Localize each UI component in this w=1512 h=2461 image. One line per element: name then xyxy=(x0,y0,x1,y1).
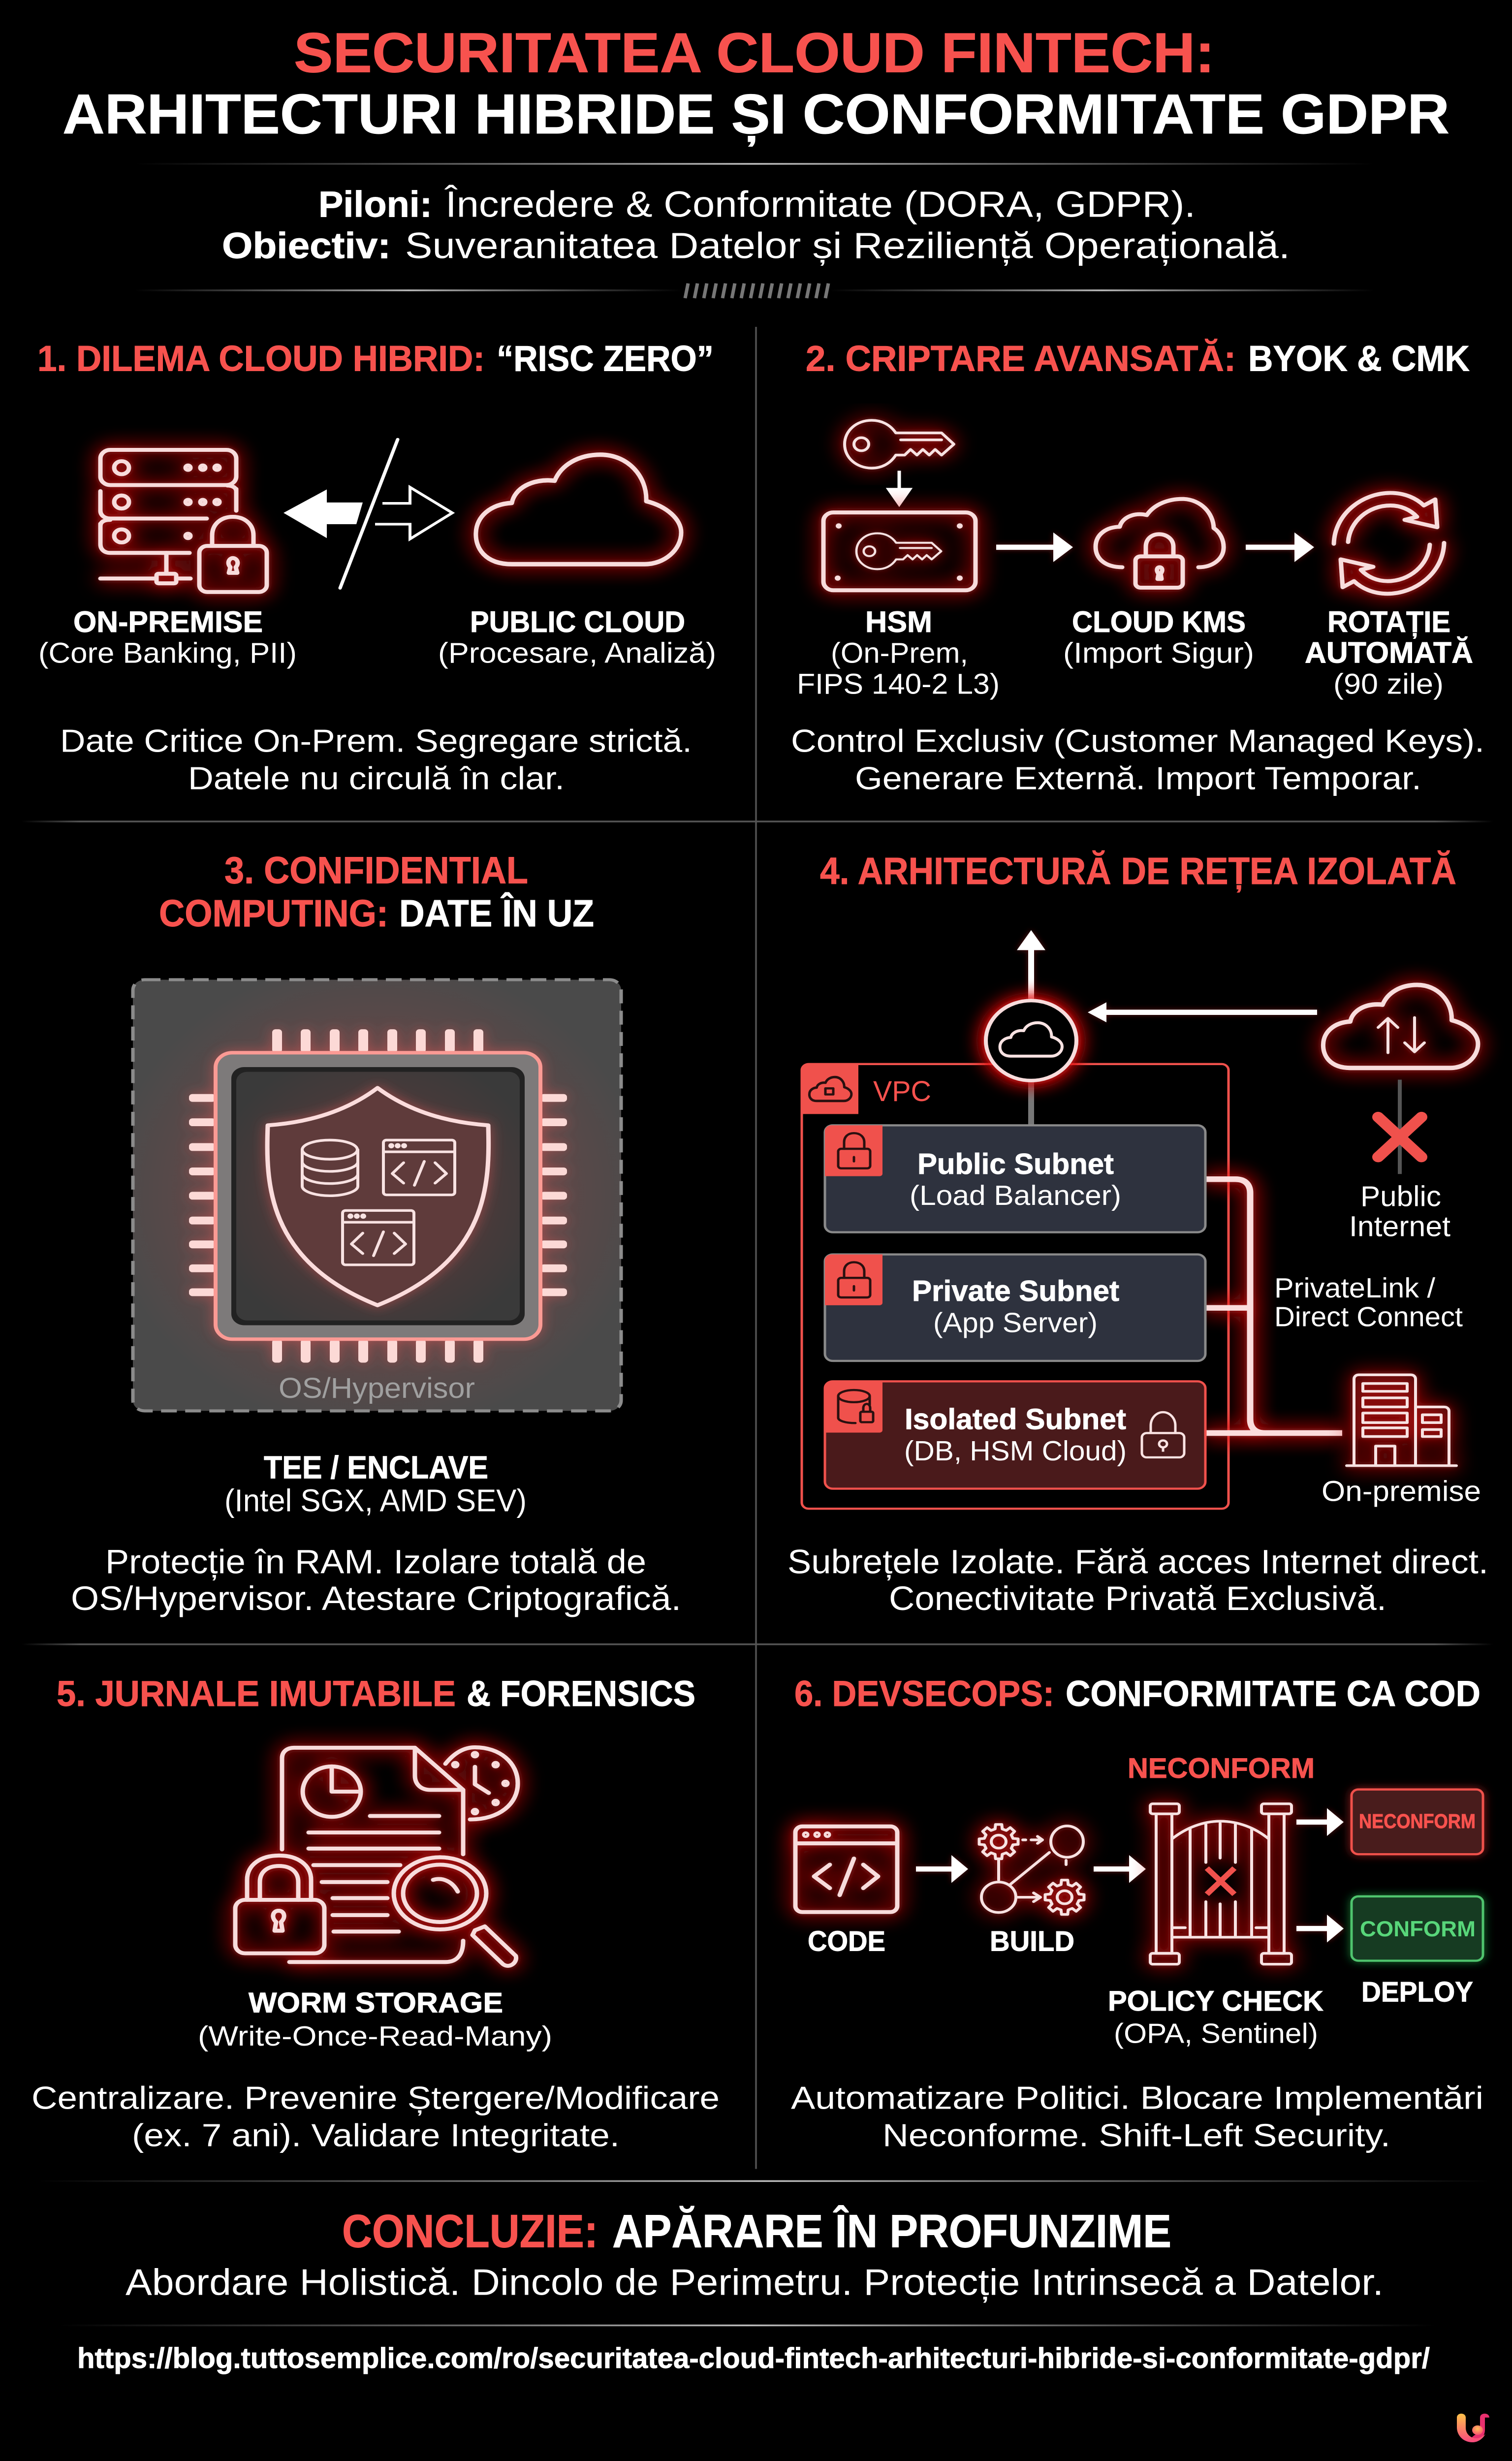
label: WORM storage: (Write-Once-Read-Many) xyxy=(198,2020,552,2051)
subnet: public: Public Subnet xyxy=(917,1148,1114,1180)
icon: red X block xyxy=(1378,1117,1421,1157)
icon: code window 2 xyxy=(343,1210,414,1265)
label: HSM: (On-Prem, xyxy=(831,637,968,669)
title xyxy=(63,22,1449,146)
label: TEE enclave xyxy=(224,1449,527,1518)
icon: red X on gate xyxy=(1207,1868,1234,1894)
icon: chip with pins xyxy=(189,1029,567,1362)
description 1: Datele nu circulă în clar. xyxy=(188,760,565,796)
icon: public internet cloud xyxy=(1323,985,1478,1068)
subnet: public xyxy=(825,1125,1205,1232)
icon: internet gateway xyxy=(986,1001,1076,1080)
icon: build graph and gears xyxy=(979,1825,1084,1915)
icon: on-premise building xyxy=(1347,1375,1456,1466)
subnet: private: Private Subnet xyxy=(912,1275,1119,1307)
icon: policy gate xyxy=(1150,1804,1292,1964)
arrow: code to build xyxy=(916,1855,968,1883)
badge: neconform: NECONFORM xyxy=(1359,1811,1476,1833)
heading 1: 1. DILEMA CLOUD HIBRID: xyxy=(37,338,485,379)
description 4 xyxy=(788,1543,1488,1617)
icon: shield xyxy=(267,1088,489,1305)
label: rotation: ROTAȚIE xyxy=(1327,605,1450,639)
VPC container: VPC xyxy=(873,1075,931,1107)
subtitle xyxy=(222,184,1290,266)
conclusion: APĂRARE ÎN PROFUNZIME xyxy=(612,2206,1171,2257)
arrow: key to HSM xyxy=(889,471,910,504)
arrow: HSM to KMS xyxy=(996,533,1073,562)
description 2: Generare Externă. Import Temporar. xyxy=(855,760,1421,796)
description 3 xyxy=(71,1543,681,1617)
subtitle: Suveranitatea Datelor și Reziliență Operațională. xyxy=(405,225,1290,266)
label: policy check: (OPA, Sentinel) xyxy=(1114,2018,1318,2049)
arrow: inbound to gateway xyxy=(1088,1002,1317,1022)
label: HSM: FIPS 140-2 L3) xyxy=(797,668,1000,700)
label: deploy: DEPLOY xyxy=(1361,1976,1473,2008)
label: PrivateLink xyxy=(1274,1272,1463,1332)
subnet: isolated xyxy=(825,1381,1205,1489)
subtitle: Încredere & Conformitate (DORA, GDPR). xyxy=(444,184,1196,225)
description 6: Neconforme. Shift-Left Security. xyxy=(882,2117,1390,2153)
subnet: public: (Load Balancer) xyxy=(910,1179,1121,1211)
icon: log document, clock, lock, magnifier xyxy=(235,1747,518,1966)
label: public internet: Internet xyxy=(1349,1211,1450,1243)
OS hypervisor dashed box xyxy=(133,979,621,1411)
panel: 5 immutable logs xyxy=(32,1673,720,2153)
description 1 xyxy=(60,723,692,796)
label: policy check: POLICY CHECK xyxy=(1108,1985,1323,2017)
label: WORM storage xyxy=(198,1987,552,2051)
label: build: BUILD xyxy=(990,1925,1074,1956)
connector: private link bus xyxy=(1205,1179,1342,1433)
heading 5: 5. JURNALE IMUTABILE xyxy=(57,1673,456,1714)
description 3: OS/Hypervisor. Atestare Criptografică. xyxy=(71,1579,681,1617)
heading 6: 6. DEVSECOPS: xyxy=(794,1673,1054,1714)
conclusion: Abordare Holistică. Dincolo de Perimetru. Protecție Intrinsecă a Datelor. xyxy=(126,2261,1384,2303)
subtitle: Piloni: xyxy=(318,184,432,225)
subnet: isolated: (DB, HSM Cloud) xyxy=(904,1435,1127,1466)
label: on-premise xyxy=(38,605,297,669)
description 5: Centralizare. Prevenire Ștergere/Modificare xyxy=(32,2080,720,2116)
label: on-premise: ON-PREMISE xyxy=(73,605,263,638)
description 1: Date Critice On-Prem. Segregare strictă. xyxy=(60,723,692,759)
icon: on-premise server with lock xyxy=(100,450,267,592)
icon: code window xyxy=(795,1827,897,1912)
label: cloud KMS: (Import Sigur) xyxy=(1063,637,1254,669)
heading 3: COMPUTING: xyxy=(159,893,388,935)
label: public cloud xyxy=(438,605,716,669)
arrow: outbound up xyxy=(1017,930,1045,1001)
label: cloud KMS: CLOUD KMS xyxy=(1072,605,1246,638)
panel: 6 devsecops xyxy=(791,1673,1483,2153)
label: neconform top: NECONFORM xyxy=(1128,1752,1315,1784)
heading 3: DATE ÎN UZ xyxy=(399,892,594,935)
icon: rotation arrows xyxy=(1334,493,1444,594)
label: WORM storage: WORM STORAGE xyxy=(249,1987,503,2019)
label: rotation: (90 zile) xyxy=(1333,668,1444,700)
icon: code window xyxy=(383,1140,455,1195)
badge: conform xyxy=(1352,1896,1483,1961)
conclusion: CONCLUZIE: xyxy=(342,2206,598,2257)
heading 2: BYOK & CMK xyxy=(1248,338,1470,379)
conclusion xyxy=(126,2206,1384,2303)
blocked connection line xyxy=(1398,1080,1402,1174)
description 5: (ex. 7 ani). Validare Integritate. xyxy=(132,2117,620,2153)
subnet: isolated: Isolated Subnet xyxy=(905,1403,1126,1436)
description 6 xyxy=(791,2080,1483,2153)
heading 5: & FORENSICS xyxy=(467,1673,695,1714)
label: cloud KMS xyxy=(1063,605,1254,669)
panel: 1 hybrid cloud dilemma xyxy=(37,338,716,796)
label: TEE enclave: TEE / ENCLAVE xyxy=(264,1449,488,1485)
description 2: Control Exclusiv (Customer Managed Keys). xyxy=(791,723,1484,759)
title: SECURITATEA CLOUD FINTECH: xyxy=(294,22,1215,84)
badge: neconform xyxy=(1352,1790,1483,1854)
icon: cloud KMS with lock xyxy=(1096,499,1224,588)
badge: conform: CONFORM xyxy=(1360,1917,1476,1941)
label: rotation xyxy=(1305,605,1473,700)
subnet: private: (App Server) xyxy=(933,1307,1098,1338)
label: public cloud: PUBLIC CLOUD xyxy=(470,605,685,638)
connector: gateway to public subnet xyxy=(1028,1081,1034,1125)
arrow: to conform xyxy=(1296,1915,1344,1942)
label: TEE enclave: (Intel SGX, AMD SEV) xyxy=(224,1483,527,1518)
arrow: build to policy xyxy=(1094,1855,1146,1883)
description 5 xyxy=(32,2080,720,2153)
heading 3 xyxy=(159,850,594,935)
description 2 xyxy=(791,723,1484,796)
label: OS/Hypervisor: OS/Hypervisor xyxy=(279,1373,475,1404)
heading 2: 2. CRIPTARE AVANSATĂ: xyxy=(806,338,1236,379)
label: HSM: HSM xyxy=(865,605,932,638)
label: rotation: AUTOMATĂ xyxy=(1305,636,1473,669)
label: on-premise: On-premise xyxy=(1322,1476,1481,1507)
icon: logo xyxy=(1457,2414,1489,2442)
label: code: CODE xyxy=(808,1925,885,1956)
label: public internet xyxy=(1349,1181,1450,1243)
label: public cloud: (Procesare, Analiză) xyxy=(438,637,716,669)
heading 3: 3. CONFIDENTIAL xyxy=(224,850,528,891)
subtitle: Obiectiv: xyxy=(222,225,391,266)
label: HSM xyxy=(797,605,1000,700)
description 6: Automatizare Politici. Blocare Implementări xyxy=(791,2080,1483,2116)
arrow: blocked flow left solid and right outline, with slash xyxy=(284,440,452,588)
subnet: private xyxy=(825,1255,1205,1361)
label: public internet: Public xyxy=(1360,1181,1441,1213)
heading 1: “RISC ZERO” xyxy=(497,338,714,379)
description 4: Conectivitate Privată Exclusivă. xyxy=(889,1579,1386,1617)
panel: 2 advanced encryption xyxy=(791,338,1484,796)
panel: 3 confidential computing xyxy=(71,850,681,1617)
arrow: to neconform xyxy=(1296,1808,1344,1836)
label: PrivateLink: Direct Connect xyxy=(1274,1301,1463,1332)
icon: HSM device xyxy=(823,512,976,590)
panel: 4 isolated network architecture xyxy=(788,851,1488,1617)
icon: public cloud xyxy=(476,455,681,564)
description 3: Protecție în RAM. Izolare totală de xyxy=(105,1543,646,1581)
icon: key xyxy=(845,420,954,468)
label: PrivateLink: PrivateLink / xyxy=(1274,1272,1435,1303)
arrow: KMS to rotation xyxy=(1246,533,1314,562)
label: policy check xyxy=(1108,1985,1323,2049)
icon: database xyxy=(302,1140,358,1196)
VPC container xyxy=(802,1064,1228,1509)
heading 6 xyxy=(794,1673,1480,1714)
label: on-premise: (Core Banking, PII) xyxy=(38,637,297,669)
